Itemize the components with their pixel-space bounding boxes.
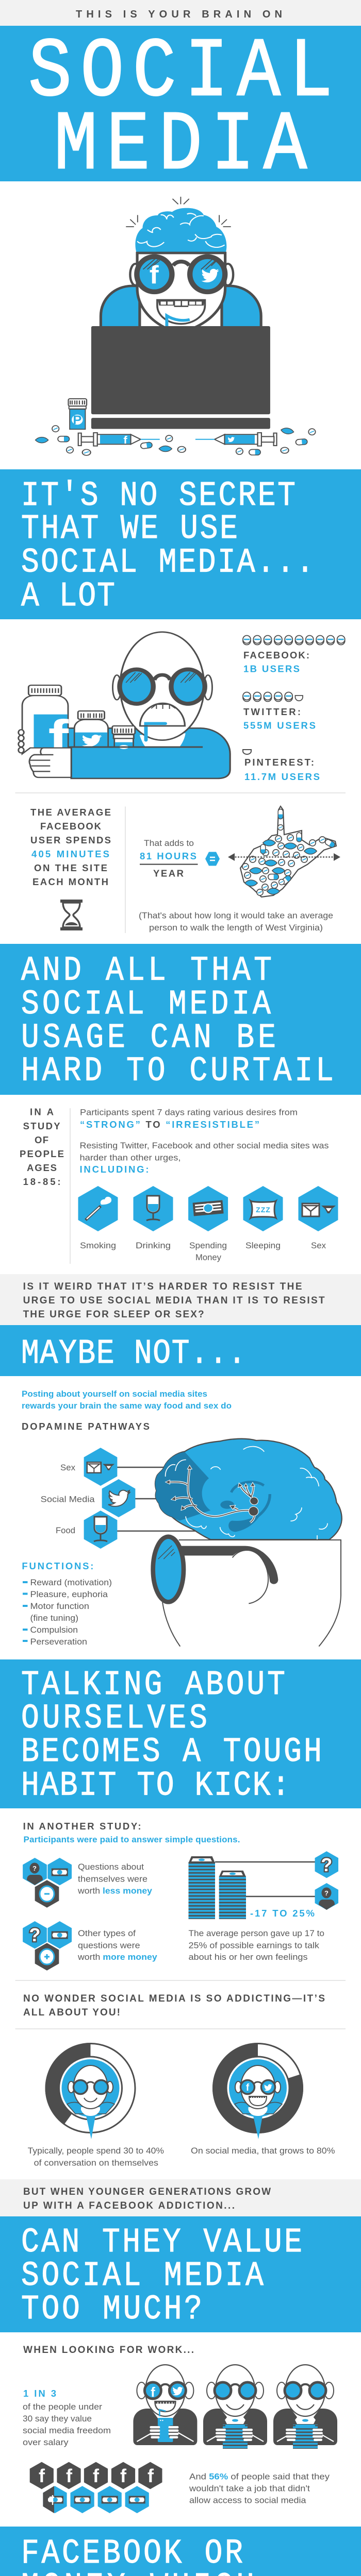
user stats [243, 636, 345, 782]
text: earnings given up: 25% of possible earnings to talk [189, 1941, 320, 1951]
study demographic: IN A [30, 1107, 54, 1117]
dark midbrain shapes [220, 1482, 270, 1532]
pointer [253, 2116, 262, 2139]
facebook tablets [243, 636, 345, 645]
hexagon: sex: Sex [311, 1241, 326, 1250]
text: less money: themselves were [78, 1874, 147, 1884]
hexagon: drinking: Drinking [136, 1241, 171, 1250]
section heading: no secret: IT'S NO SECRET [21, 477, 296, 515]
section heading: tough habit [0, 1659, 361, 1808]
icon cluster: about themselves less money: ? [32, 1865, 37, 1872]
average user time: EACH MONTH [32, 876, 108, 887]
money stack [293, 2417, 318, 2449]
hero illustration: addict at laptop [36, 197, 316, 455]
one in three text: 1 IN 3 [23, 2388, 56, 2399]
one in three text [23, 2388, 111, 2447]
kicker text: THIS IS YOUR BRAIN ON [76, 9, 282, 20]
study demographic: AGES [27, 1162, 57, 1173]
younger generations banner: BUT WHEN YOUNGER GENERATIONS GROW [23, 2187, 271, 2197]
younger generations banner: UP WITH A FACEBOOK ADDICTION... [23, 2200, 235, 2211]
younger generations banner [0, 2179, 361, 2216]
section heading: maybe not: MAYBE NOT... [21, 1334, 246, 1373]
addicted details: f [151, 2384, 155, 2400]
money stack comparison [189, 1851, 338, 1919]
donut chart: 30 to 40 percent [45, 2043, 135, 2139]
percent label: -17 TO 25% [250, 1908, 315, 1919]
study demographic: 18-85: [23, 1176, 61, 1187]
title text: SOCIAL [28, 25, 333, 120]
head [120, 632, 204, 740]
large facebook bottle [22, 685, 69, 766]
equals hexagon [205, 852, 220, 866]
functions list: Pleasure, euphoria [30, 1589, 108, 1599]
average user time: 405 MINUTES [31, 849, 109, 859]
hexagon: social media [41, 1479, 135, 1517]
left syringe [78, 433, 160, 446]
small pinterest bottle [112, 726, 135, 749]
section heading: no secret [0, 469, 361, 619]
study description: INCLUDING: [79, 1164, 149, 1175]
section heading: value too much [0, 2216, 361, 2332]
large facebook bottle: f [48, 709, 69, 766]
smiling face [67, 2065, 114, 2116]
text: 56 percent: And 56% of people said that they [189, 2472, 330, 2482]
functions list: Perseveration [30, 1637, 87, 1647]
walking note: person to walk the length of West Virginia) [149, 923, 323, 933]
hexagon: spending money: Money [195, 1252, 221, 1262]
addicting statement: ALL ABOUT YOU! [23, 2007, 120, 2018]
study demographic: PEOPLE [20, 1148, 64, 1159]
sunglasses [120, 669, 205, 704]
scattered pills [36, 426, 316, 455]
dopamine label: DOPAMINE PATHWAYS [22, 1421, 150, 1432]
pinterest pill bottle [69, 399, 87, 429]
dopamine pathways [168, 1467, 254, 1522]
face [137, 253, 225, 327]
hexagon: sleeping: Sleeping [245, 1241, 281, 1250]
pinterest pill bottle: P [73, 414, 82, 427]
smile [226, 2404, 244, 2410]
laughing face: f [246, 2082, 250, 2093]
glasses [137, 257, 225, 292]
hexagon grid: facebook versus money [30, 2462, 162, 2513]
text: more money: worth more money [77, 1952, 157, 1962]
money row [43, 2486, 149, 2513]
text: 56 percent: wouldn't take a job that didn't [189, 2484, 310, 2494]
icon cluster: about themselves less money [23, 1858, 72, 1908]
section heading: no secret: THAT WE USE [21, 510, 238, 548]
brain folds [166, 1447, 327, 1539]
text: earnings given up: The average person gave up 17 to [189, 1928, 324, 1938]
section heading: no secret: SOCIAL MEDIA... [21, 543, 314, 582]
hexagon: sex: Sex [60, 1463, 75, 1472]
illustration: addict with pill bottles [19, 632, 230, 778]
hexagon: question [315, 1851, 338, 1878]
right syringe [195, 433, 277, 446]
section heading: maybe not [0, 1325, 361, 1376]
another study intro: IN ANOTHER STUDY: [23, 1821, 141, 1832]
section heading: value too much: CAN THEY VALUE [21, 2223, 302, 2262]
brain [155, 1439, 342, 1539]
laptop [91, 326, 270, 429]
top banner [0, 0, 361, 26]
average user time: USER SPENDS [30, 835, 111, 845]
laughing face [235, 2065, 282, 2116]
section heading: hard to curtail: USAGE CAN BE [21, 1019, 276, 1057]
study demographic: OF [35, 1134, 48, 1145]
functions list: (fine tuning) [30, 1613, 78, 1623]
hexagon grid: facebook versus money: f [93, 2465, 100, 2486]
hexagon: smoking: Smoking [80, 1241, 116, 1250]
study description: harder than other urges, [79, 1153, 180, 1162]
functions list [22, 1561, 112, 1647]
chest [140, 733, 186, 747]
text: earnings given up: about his or her own feelings [189, 1952, 307, 1962]
twitter stat: 555M USERS [243, 720, 316, 731]
ear [233, 1550, 268, 1603]
text: more money: questions were [78, 1941, 140, 1951]
fraction: 81 hours per year: YEAR [153, 868, 184, 879]
medium twitter bottle [74, 711, 108, 747]
one in three text: 30 say they value [23, 2414, 92, 2424]
hexagon: spending money [188, 1186, 228, 1262]
title text [28, 25, 333, 193]
icon cluster: other questions more money [23, 1921, 72, 1971]
arrow: length of state [228, 853, 340, 861]
another study intro [23, 1821, 240, 1844]
head outline [162, 1540, 341, 1647]
hands [216, 2428, 253, 2441]
caption: On social media, that grows to 80% [191, 2146, 335, 2156]
hexagon: food: Food [56, 1526, 75, 1535]
hexagon grid: facebook versus money: f [66, 2465, 73, 2486]
functions list: Reward (motivation) [30, 1578, 112, 1587]
text: more money [77, 1928, 157, 1962]
addicted details [150, 2384, 183, 2442]
average user time: FACEBOOK [40, 821, 102, 832]
caption [28, 2146, 164, 2168]
figure: chooses money [273, 2365, 337, 2449]
ears [130, 264, 233, 285]
hexagon: question: ? [321, 1854, 332, 1875]
section heading: value too much: TOO MUCH? [21, 2290, 202, 2329]
facebook f in lens: f [150, 260, 159, 289]
fraction: 81 hours per year: That adds to [144, 838, 194, 848]
text: less money [77, 1862, 153, 1896]
study demographic [20, 1107, 64, 1187]
text: earnings given up [189, 1928, 324, 1962]
map: west virginia filled with pills [240, 806, 336, 897]
hand [19, 730, 71, 777]
line over arm [71, 744, 203, 749]
caption: Typically, people spend 30 to 40% [28, 2146, 164, 2156]
hexagon: sex [298, 1186, 338, 1250]
pinterest stat: PINTEREST: [244, 757, 314, 768]
hexagon grid: facebook versus money: f [147, 2465, 154, 2486]
text: 56 percent: allow access to social media [189, 2496, 306, 2505]
hexagon: spending money: Spending [189, 1241, 227, 1250]
one in three text: social media freedom [23, 2426, 111, 2435]
facebook stat: FACEBOOK: [243, 650, 309, 660]
glasses temple [180, 1546, 278, 1584]
pinterest tablet [243, 750, 251, 754]
one in three text: over salary [23, 2437, 69, 2447]
posting intro [22, 1389, 232, 1411]
icon cluster: other questions more money: ? [29, 1924, 40, 1945]
section heading: hard to curtail [0, 944, 361, 1095]
hexagon grid: facebook versus money: f [120, 2465, 127, 2486]
hexagon: sleeping: ZZZ [256, 1206, 271, 1214]
walking note: (That's about how long it would take an average [139, 911, 333, 921]
functions list: Compulsion [30, 1625, 78, 1635]
facebook stat: 1B USERS [243, 664, 300, 674]
section heading: tough habit: BECOMES A TOUGH [21, 1733, 322, 1771]
hexagon: person [315, 1883, 338, 1910]
prefrontal region [155, 1452, 210, 1521]
caption: of conversation on themselves [34, 2158, 158, 2168]
donut chart: 80 percent [212, 2043, 303, 2139]
hexagon: social media: Social Media [41, 1494, 95, 1504]
fraction: 81 hours per year: 81 HOURS [140, 851, 196, 861]
twitter tablets [243, 692, 303, 702]
text: 56 percent [189, 2472, 330, 2505]
addicting statement [23, 1993, 325, 2018]
hands [286, 2428, 323, 2441]
average user time: THE AVERAGE [30, 807, 111, 818]
posting intro: Posting about yourself on social media sites [22, 1389, 207, 1399]
short stack [219, 1871, 246, 1919]
text: less money: worth less money [77, 1886, 153, 1896]
section heading: facebook or money [0, 2527, 361, 2576]
hexagon: food [56, 1511, 117, 1549]
addicting statement: NO WONDER SOCIAL MEDIA IS SO ADDICTING—IT’S [23, 1993, 325, 2004]
average user time [30, 807, 111, 887]
hexagon: sleeping [243, 1186, 283, 1250]
functions list: Motor function [30, 1601, 89, 1611]
figure: chooses money [203, 2365, 267, 2449]
section heading: facebook or money: FACEBOOK OR [21, 2534, 243, 2573]
arm and torso [68, 728, 230, 778]
hexagon: sex [60, 1448, 117, 1486]
title panel [0, 25, 361, 193]
twitter stat: TWITTER: [243, 706, 301, 717]
section heading: tough habit: OURSELVES [21, 1699, 207, 1738]
mouth [157, 299, 205, 326]
brain [135, 208, 226, 252]
smile [297, 2404, 314, 2410]
phone [158, 2418, 173, 2442]
section heading: hard to curtail: HARD TO CURTAIL [21, 1052, 334, 1091]
section heading: hard to curtail: SOCIAL MEDIA [21, 985, 271, 1024]
question banner: THE URGE FOR SLEEP OR SEX? [23, 1309, 204, 1320]
open mouth [140, 703, 185, 740]
functions list: FUNCTIONS: [22, 1561, 93, 1571]
glasses lens [153, 1537, 184, 1602]
title text: MEDIA [54, 98, 307, 193]
hexagon: drinking [133, 1186, 173, 1250]
study description: Resisting Twitter, Facebook and other social media sites was [79, 1141, 329, 1150]
pinterest stat [244, 757, 320, 782]
hexagon: person: ? [324, 1889, 329, 1897]
question banner: URGE TO USE SOCIAL MEDIA THAN IT IS TO RESIST [23, 1295, 325, 1306]
text: more money: Other types of [78, 1928, 136, 1938]
study demographic: STUDY [23, 1121, 60, 1131]
question banner: IS IT WEIRD THAT IT’S HARDER TO RESIST THE [23, 1281, 302, 1292]
section heading: value too much: SOCIAL MEDIA [21, 2257, 264, 2295]
sparks around brain [126, 197, 231, 227]
figure: chooses social media phone [133, 2365, 197, 2445]
one in three text: of the people under [23, 2402, 102, 2412]
connector lines [116, 1467, 201, 1531]
section heading: hard to curtail: AND ALL THAT [21, 951, 272, 990]
study description: Participants spent 7 days rating various desires from [80, 1108, 298, 1117]
section heading: tough habit: HABIT TO KICK: [21, 1766, 290, 1805]
hands [150, 2426, 160, 2438]
pointer [86, 2116, 95, 2139]
text: less money: Questions about [78, 1862, 144, 1872]
hexagon grid: facebook versus money: f [39, 2465, 45, 2486]
ears [112, 675, 212, 700]
study description [79, 1108, 329, 1175]
tall stack [189, 1856, 215, 1919]
walking note [139, 911, 333, 933]
profile head with brain and dopamine pathways [153, 1439, 342, 1647]
icon: hourglass [60, 900, 83, 930]
fraction: 81 hours per year [140, 838, 198, 879]
another study intro: Participants were paid to answer simple questions. [24, 1835, 240, 1844]
facebook stat [243, 650, 309, 674]
twitter bird in lens [201, 269, 219, 282]
section heading: no secret: A LOT [21, 577, 115, 616]
pinterest stat: 11.7M USERS [244, 771, 320, 782]
shoulders [101, 286, 261, 328]
facebook row [30, 2462, 162, 2489]
question banner [0, 1274, 361, 1325]
posting intro: rewards your brain the same way food and sex do [22, 1401, 232, 1411]
section heading: tough habit: TALKING ABOUT [21, 1666, 285, 1704]
left syringe: f [123, 434, 128, 446]
hexagon: smoking [78, 1186, 118, 1250]
looking for work label: WHEN LOOKING FOR WORK... [23, 2345, 194, 2355]
study description: “STRONG” TO “IRRESISTIBLE” [80, 1119, 259, 1130]
money stack [223, 2417, 248, 2449]
average user time: ON THE SITE [34, 862, 107, 873]
twitter stat [243, 706, 316, 731]
